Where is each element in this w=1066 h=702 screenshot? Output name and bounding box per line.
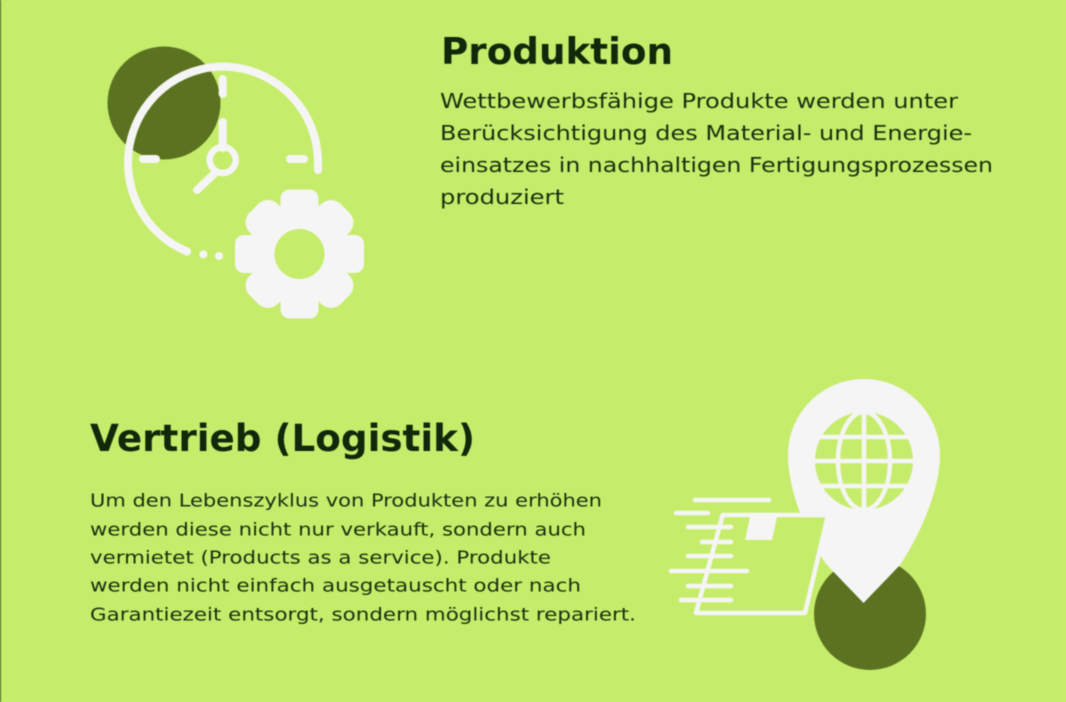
text block: Vertrieb description: vermietet (Products as a service). Produkte [90, 548, 551, 568]
icon: clock [128, 67, 318, 260]
icon: location pin with globe [788, 379, 940, 603]
text block: Produktion description: einsatzes in nachhaltigen Fertigungsprozessen [440, 153, 993, 177]
dark circle behind pin [814, 558, 926, 670]
text block: Produktion description [440, 89, 993, 209]
text block: Vertrieb description: werden nicht einfach ausgetauscht oder nach [90, 576, 581, 596]
dark circle behind clock [108, 46, 220, 160]
text block: Vertrieb description: Garantiezeit entsorgt, sondern möglichst repariert. [90, 604, 636, 626]
panel: Produktion icon [108, 46, 364, 318]
text block: Produktion description: Berücksichtigung des Material- und Energie- [440, 121, 972, 145]
heading: Produktion: Produktion [441, 30, 673, 73]
heading: Vertrieb (Logistik): Vertrieb (Logistik) [90, 417, 475, 460]
speed lines [671, 500, 769, 600]
icon: gear [235, 190, 364, 318]
text block: Produktion description: Wettbewerbsfähige Produkte werden unter [440, 89, 959, 113]
icon: delivery box [696, 515, 828, 613]
text block: Vertrieb description [90, 490, 636, 626]
text block: Vertrieb description: werden diese nicht nur verkauft, sondern auch [90, 520, 586, 540]
text block: Produktion description: produziert [440, 185, 564, 209]
panel: Vertrieb icon [671, 379, 940, 670]
text block: Vertrieb description: Um den Lebenszyklus von Produkten zu erhöhen [90, 490, 602, 512]
